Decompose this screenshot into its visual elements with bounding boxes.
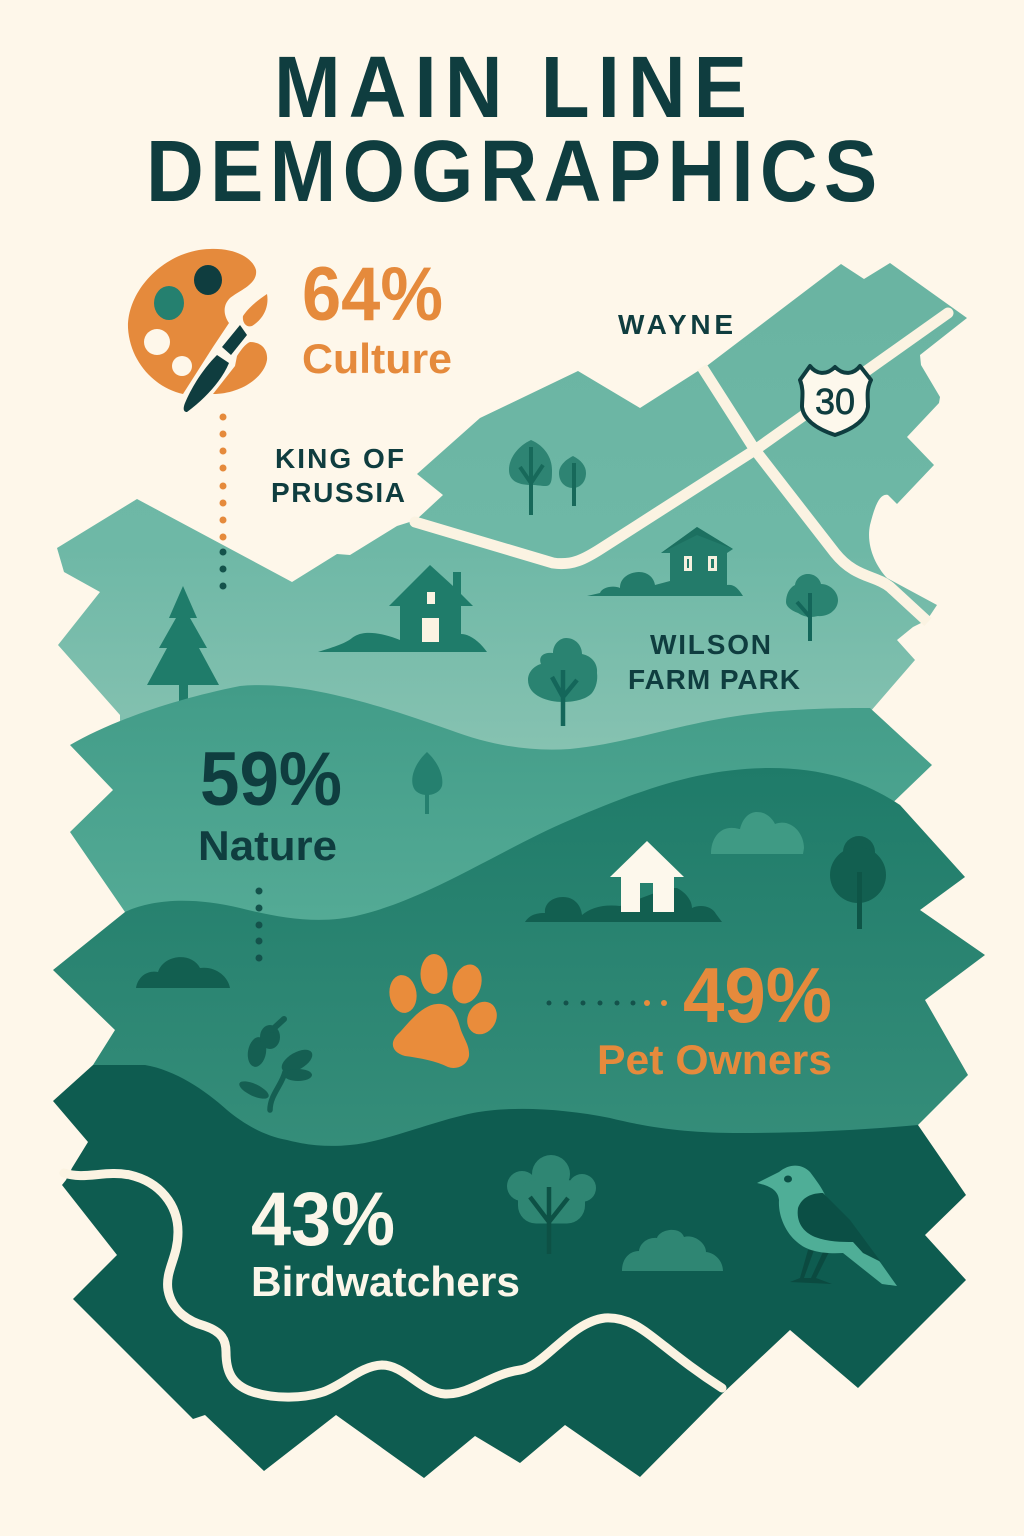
icon: pine tree [147,586,219,701]
title: DEMOGRAPHICS [146,122,884,220]
road: Route 30 [415,313,948,564]
dotted leader: Nature [256,888,262,962]
title [146,38,884,220]
stat: 64% Culture: 64% [302,252,443,337]
icon: bird [757,1166,897,1286]
label: King of Prussia [271,443,405,508]
icon: dark tree right [830,836,886,929]
label: Wilson Farm Park: WILSON [650,629,771,660]
stat: 59% Nature: Nature [198,822,337,869]
stat: 43% Birdwatchers: 43% [251,1177,395,1262]
icon: small tree in upper map [559,456,586,506]
stat: 49% Pet Owners: Pet Owners [597,1036,832,1083]
road: cross street [702,367,928,622]
icon: round tree right [786,574,838,641]
icon: route 30 shield: 30 [815,381,855,422]
icon: plant sprig [237,1019,316,1110]
icon: bush lower [622,1230,723,1271]
map layer: fourth band (Pet Owners) [53,768,985,1180]
icon: small leaf tree [412,752,442,814]
icon: paw print [387,954,503,1068]
icon: route 30 shield [800,366,871,435]
label: Wilson Farm Park: FARM PARK [628,664,800,695]
label: King of Prussia: KING OF [275,443,404,474]
map layer: third band (Nature) [70,685,932,950]
icon: tree lower [507,1155,596,1254]
stat: 64% Culture: Culture [302,335,452,382]
river [64,1173,722,1397]
map layer: fifth band (Birdwatchers) [53,1065,966,1478]
stat: 49% Pet Owners [597,951,832,1083]
icon: tree centre [528,638,597,726]
icon: palette and brush [128,249,267,412]
label: Wilson Farm Park [628,629,800,695]
stat: 59% Nature [198,737,342,869]
dotted leader: Pet Owners [546,1000,667,1006]
stat: 59% Nature: 59% [200,737,342,822]
stat: 43% Birdwatchers [251,1177,520,1305]
icon: house with chimney [318,565,487,652]
dotted leader: Culture [220,414,226,590]
stat: 43% Birdwatchers: Birdwatchers [251,1258,520,1305]
stat: 64% Culture [302,252,452,382]
stat: 49% Pet Owners: 49% [683,951,832,1039]
icon: bush on left [136,957,230,988]
title: MAIN LINE [274,38,755,136]
icon: tree in upper map [509,440,552,515]
label: Wayne: WAYNE [618,309,733,340]
map layer: light upper map with Wayne and Wilson Farm Park [57,263,967,760]
label: King of Prussia: PRUSSIA [271,477,405,508]
icon: house with windows [587,527,743,596]
icon: cloud bush light [711,812,804,854]
icon: white house with bushes [525,841,722,922]
